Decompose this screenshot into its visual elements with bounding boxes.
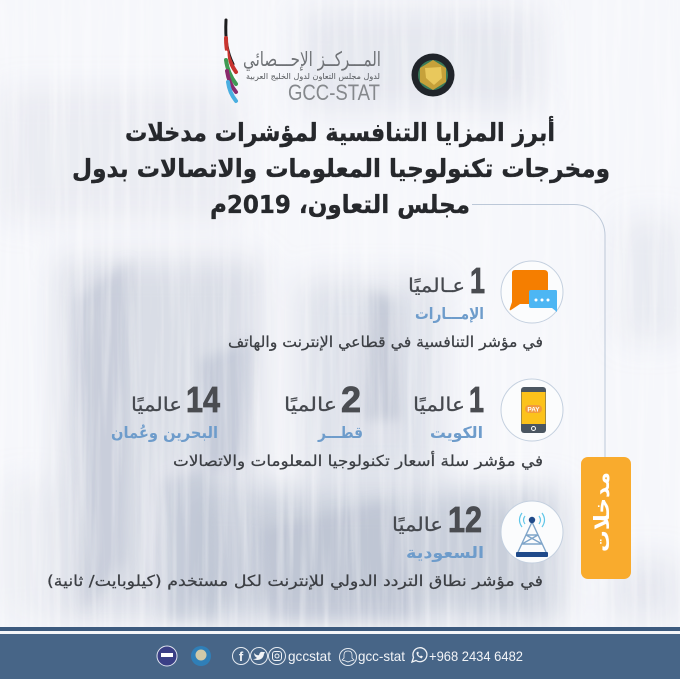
logo Arabic subtitle: لدول مجلس التعاون لدول الخليج العربية (246, 72, 380, 81)
phone number: +968 2434 6482 (429, 648, 523, 664)
icon: twitter (250, 648, 268, 664)
icon: snapchat (340, 648, 356, 666)
country: Kuwait: الكويت (430, 423, 483, 442)
rank: Qatar: 2 (341, 379, 361, 420)
icon: chat bubbles (501, 261, 563, 323)
icon: signal tower (501, 501, 563, 563)
icon: facebook: f (239, 649, 244, 664)
rank: Kuwait: 1 (469, 379, 484, 420)
rank label: عـالميًا (408, 275, 465, 297)
title: أبرز المزايا التنافسية لمؤشرات مدخلات (125, 116, 555, 148)
description: في مؤشر التنافسية في قطاعي الإنترنت والهاتف (228, 333, 543, 352)
country: السعودية (406, 543, 484, 562)
icon: mobile pay (501, 379, 563, 441)
title: ومخرجات تكنولوجيا المعلومات والاتصالات بدول (72, 154, 610, 184)
item 2: telecom prices (111, 379, 563, 471)
label: عالميًا (131, 394, 182, 416)
title: مجلس التعاون، 2019م (210, 190, 470, 220)
item 1: UAE (228, 260, 563, 352)
logo Latin name: GCC-STAT (288, 80, 380, 105)
footer bar (0, 627, 680, 679)
rank: 1 (470, 260, 485, 301)
description: في مؤشر سلة أسعار تكنولوجيا المعلومات والاتصالات (173, 451, 543, 471)
logo: GCC-STAT (226, 20, 381, 105)
item 3: Saudi Arabia (47, 499, 563, 591)
icon: instagram (268, 648, 286, 664)
description: في مؤشر نطاق التردد الدولي للإنترنت لكل مستخدم (كيلوبايت/ ثانية) (47, 572, 543, 591)
side tab: inputs (581, 457, 631, 579)
country: Bahrain and Oman: البحرين وعُمان (111, 423, 218, 442)
country: Qatar: قطـــر (317, 423, 363, 442)
icon: mobile pay: PAY (527, 406, 540, 414)
rank: Bahrain and Oman: 14 (186, 379, 220, 420)
label: عالميًا (284, 394, 337, 416)
handle: gccstat: gccstat (288, 648, 331, 664)
title (72, 116, 610, 220)
icon: GCC-STAT seal (157, 646, 177, 666)
rank: 12 (448, 499, 482, 540)
side tab: inputs: مدخلات (590, 472, 614, 552)
country: الإمـــارات (415, 304, 484, 323)
logo Arabic name: المـــركــز الإحـــصائي (243, 47, 381, 72)
logo ribbon (226, 20, 236, 101)
panel outline (472, 204, 605, 458)
handle: gcc-stat: gcc-stat (358, 648, 405, 664)
label: عالميًا (413, 394, 465, 416)
icon: GCC emblem (412, 54, 454, 96)
icon: facebook (232, 648, 250, 664)
icon: TUV seal (191, 646, 211, 666)
icon: whatsapp (412, 648, 427, 662)
rank label: عالميًا (392, 514, 443, 536)
